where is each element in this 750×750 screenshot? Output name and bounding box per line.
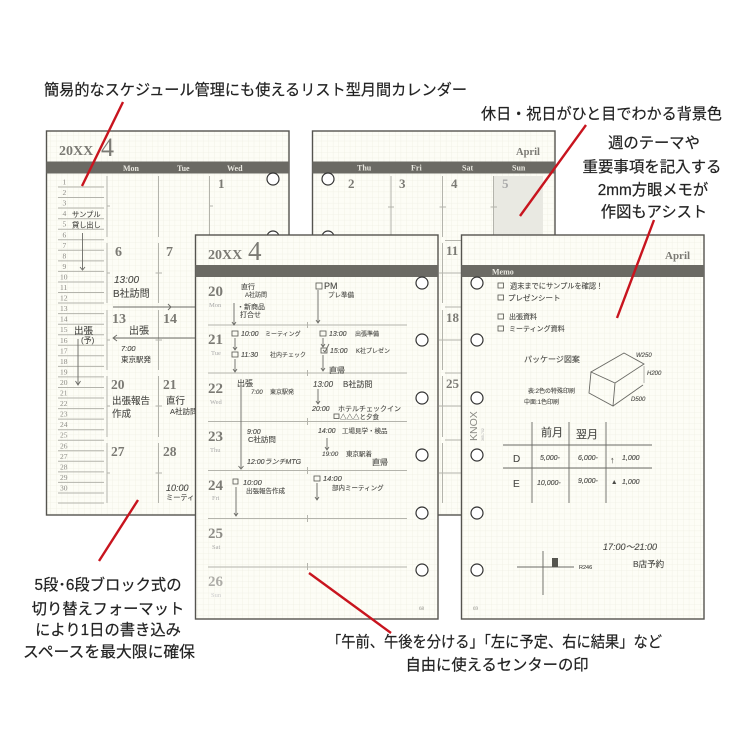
handwritten notes: Tuesday 21: 10:00 [241, 331, 259, 338]
date numbers on left page [111, 176, 224, 459]
handwritten notes: Tuesday 21: 社内チェック [270, 351, 306, 359]
handwritten notes: Monday 20: A社訪問 [245, 291, 267, 299]
dates and weekdays 20 to 26: 25 [208, 526, 223, 542]
handwritten notes in day list: 出張 [74, 325, 94, 337]
list of days 1 to 30: 6 [62, 230, 66, 239]
comparison table sketch: 5,000- [540, 455, 561, 462]
comparison table sketch: 10,000- [537, 480, 561, 487]
memo header bar [462, 265, 704, 277]
dates and weekdays 20 to 26: Sat [212, 544, 220, 551]
heading: left page year and month: 20XX [59, 144, 93, 159]
callout: center marks [309, 573, 662, 674]
checklist: 出張資料 [509, 312, 537, 321]
date numbers on left page: 21 [163, 377, 177, 392]
list of days 1 to 30: 13 [60, 304, 68, 313]
heading: left page year and month: 4 [101, 133, 114, 162]
handwritten notes in day list: サンプル [72, 210, 101, 219]
handwritten notes: Wednesday 22 [237, 378, 401, 469]
package sketch with dimensions: パッケージ図案 [524, 354, 580, 364]
vertical brand label KNOX: KNOX [468, 411, 480, 441]
comparison table sketch: 翌月 [576, 428, 598, 441]
date numbers on left page: 28 [163, 444, 177, 459]
package sketch with dimensions: H200 [647, 371, 662, 377]
handwritten notes: Friday 24: 出張報告作成 [246, 486, 286, 495]
handwritten notes: Friday 24: 10:00 [243, 478, 263, 487]
callout: weekly theme memo grid: 2mm方眼メモが [598, 182, 708, 199]
handwritten notes: Friday 24: 部内ミーティング [332, 483, 384, 492]
weekday bar: Thu Fri Sat Sun [312, 162, 555, 174]
list of days 1 to 30: 24 [60, 420, 68, 429]
handwritten notes: Tuesday 21: 直帰 [329, 365, 345, 375]
comparison table sketch: E [513, 479, 520, 490]
date numbers on right page: 4 [451, 176, 458, 191]
handwritten schedule notes on left page: 作成 [112, 408, 132, 420]
list of days 1 to 30: 14 [60, 315, 68, 324]
weekday bar: Thu Fri Sat Sun: Sun [512, 164, 526, 172]
handwritten notes: Thursday 23: 19:00 [322, 451, 339, 458]
column lines on right page [388, 176, 497, 503]
map sketch with appointment note: 17:00〜21:00 [603, 542, 657, 552]
dates and weekdays 20 to 26: 24 [208, 478, 224, 494]
memo page number: 69 [473, 607, 478, 612]
list of days 1 to 30: 15 [60, 325, 68, 334]
handwritten notes: Monday 20: PM [324, 281, 338, 291]
handwritten notes: Monday 20: プレ準備 [328, 290, 354, 299]
callout: holiday background colour: 休日・祝日がひと目でわかる背景色 [481, 106, 722, 123]
holiday shaded column [494, 176, 543, 236]
dates and weekdays 20 to 26: Mon [209, 302, 222, 309]
binder holes on memo page [471, 277, 483, 576]
date numbers on left page: 13 [112, 312, 126, 327]
handwritten schedule notes on left page [112, 275, 209, 502]
list of days 1 to 30: 4 [62, 209, 66, 218]
callout: switchable block format: スペースを最大限に確保 [23, 644, 195, 661]
day divider lines with center marks [208, 322, 407, 570]
callout: weekly theme memo grid: 週のテーマや [608, 135, 700, 152]
weekday bar: Mon Tue Wed: Wed [227, 164, 243, 173]
dates and weekdays 20 to 26: 23 [208, 429, 223, 445]
memo header bar: Memo [492, 268, 514, 276]
handwritten notes: Tuesday 21: 11:30 [241, 352, 258, 359]
callout: weekly theme memo grid: 重要事項を記入する [582, 159, 722, 176]
list of days 1 to 30: 16 [60, 336, 68, 345]
date numbers on right page: 11 [446, 243, 458, 258]
package sketch with dimensions: 中面:1色印刷 [524, 398, 559, 406]
package sketch with dimensions [524, 353, 662, 406]
weekday bar: Mon Tue Wed: Tue [177, 164, 190, 173]
handwritten notes: Wednesday 22: 東京駅発 [270, 388, 294, 396]
callout: center marks: 自由に使えるセンターの印 [405, 657, 589, 674]
handwritten notes: Thursday 23: C社訪問 [248, 434, 276, 444]
handwritten notes: Thursday 23: 14:00 [318, 428, 336, 435]
handwritten schedule notes on left page: 13:00 [114, 275, 139, 286]
handwritten notes: Wednesday 22: 出張 [237, 378, 253, 388]
list of days 1 to 30: 5 [62, 220, 66, 229]
comparison table sketch: 前月 [541, 425, 563, 439]
comparison table sketch [503, 422, 652, 503]
list of days 1 to 30: 26 [60, 441, 68, 450]
handwritten notes: Friday 24 [233, 474, 384, 516]
list of days 1 to 30: 20 [60, 378, 68, 387]
date numbers on left page: 7 [166, 245, 173, 260]
month label April: April [516, 147, 540, 158]
dates and weekdays 20 to 26: 20 [208, 284, 223, 300]
vertical brand label KNOX: 365-702 [481, 428, 485, 441]
handwritten schedule notes on left page: 出張 [129, 325, 149, 337]
handwritten schedule notes on left page: 10:00 [166, 483, 189, 493]
list of days 1 to 30: 17 [60, 346, 68, 355]
map sketch with appointment note [517, 542, 664, 595]
panel: right monthly calendar page [312, 131, 555, 515]
handwritten notes: Tuesday 21: K社プレゼン [356, 347, 390, 355]
month label April on memo page: April [665, 250, 690, 262]
date numbers on right page: 2 [348, 176, 354, 191]
handwritten notes in day list: 貸し出し [72, 220, 101, 230]
list of days 1 to 30: 28 [60, 462, 68, 471]
handwritten notes: Wednesday 22: B社訪問 [343, 379, 372, 389]
map sketch with appointment note: R246 [579, 565, 592, 571]
list of days 1 to 30: 27 [60, 452, 68, 461]
page number: 68 [419, 607, 424, 612]
comparison table sketch: 1,000 [622, 455, 640, 462]
binder holes on left page [267, 173, 279, 243]
handwritten notes: Monday 20: 直行 [241, 282, 255, 291]
checklist [498, 282, 603, 333]
handwritten notes: Thursday 23: 工場見学・検品 [342, 426, 388, 435]
handwritten notes: Thursday 23 [247, 426, 388, 467]
date numbers on right page: 5 [502, 176, 509, 191]
handwritten notes: Wednesday 22: ホテルチェックイン [338, 405, 401, 413]
heading: left page year and month [59, 133, 114, 162]
comparison table sketch: 9,000- [578, 478, 599, 485]
handwritten notes: Thursday 23: 9:00 [247, 429, 261, 436]
list of days 1 to 30: 23 [60, 410, 68, 419]
list of days 1 to 30: 10 [60, 272, 68, 282]
handwritten schedule notes on left page: 直行 [166, 395, 186, 407]
callout: list-type monthly calendar: 簡易的なスケジュール管理にも使えるリスト型月間カレンダー [44, 81, 467, 99]
comparison table sketch: D [513, 454, 520, 465]
handwritten notes: Friday 24: 14:00 [323, 474, 343, 483]
list of days 1 to 30: 8 [62, 251, 66, 260]
callout: weekly theme memo grid: 作図もアシスト [601, 204, 707, 221]
handwritten notes in day list [72, 210, 101, 385]
binder holes on weekly page [416, 277, 428, 576]
handwritten notes: Wednesday 22: △△△と夕食 [340, 412, 380, 421]
list of days 1 to 30: 19 [60, 367, 68, 376]
list of days 1 to 30: 9 [62, 262, 66, 271]
callout: switchable block format: 切り替えフォーマット [32, 601, 184, 618]
callout: switchable block format: 5段･6段ブロック式の [34, 576, 182, 594]
list of days 1 to 30: 12 [60, 294, 68, 303]
handwritten schedule notes on left page: 東京駅発 [121, 354, 151, 364]
list of days 1 to 30: 1 [62, 178, 66, 186]
heading: weekly page year and month: 20XX [208, 248, 242, 263]
list of days 1 to 30: 3 [62, 199, 66, 208]
dates and weekdays 20 to 26: Thu [210, 447, 221, 454]
callout: holiday background colour [481, 106, 722, 216]
panel: memo page [462, 235, 704, 619]
date numbers on left page: 1 [218, 176, 224, 191]
handwritten schedule notes on left page: B社訪問 [113, 287, 150, 300]
dates and weekdays 20 to 26: Sun [211, 592, 222, 599]
callout: switchable block format [23, 500, 195, 661]
date numbers on right page [348, 176, 509, 391]
checklist: 週末までにサンプルを確認！ [510, 282, 603, 290]
date numbers on left page: 14 [163, 312, 177, 327]
panel: left monthly calendar page [46, 131, 289, 515]
checklist: ミーティング資料 [509, 324, 565, 333]
date numbers on right page: 25 [446, 376, 460, 391]
callout: switchable block format: により1日の書き込み [35, 622, 181, 639]
handwritten notes: Thursday 23: 直帰 [372, 457, 388, 467]
map sketch with appointment note: B店予約 [633, 559, 664, 569]
dates and weekdays 20 to 26: 22 [208, 381, 223, 397]
handwritten notes: Wednesday 22: 13:00 [313, 380, 334, 389]
handwritten notes: Wednesday 22: 7:00 [251, 390, 263, 396]
callout: weekly theme memo grid [582, 135, 722, 318]
comparison table sketch: ▲ [611, 479, 617, 486]
package sketch with dimensions: W250 [636, 353, 652, 359]
date numbers on right page: 3 [399, 176, 406, 191]
dates and weekdays 20 to 26: Tue [211, 350, 221, 357]
calendar grid column lines [107, 176, 213, 503]
list of days 1 to 30: 25 [60, 431, 68, 440]
comparison table sketch: 6,000- [578, 455, 599, 462]
dates and weekdays 20 to 26 [208, 284, 224, 599]
dark header bar [196, 265, 438, 277]
dates and weekdays 20 to 26: Fri [212, 495, 220, 502]
handwritten notes in day list: (予) [81, 336, 95, 345]
list of days 1 to 30: 21 [60, 388, 68, 398]
heading: weekly page year and month [208, 236, 262, 266]
callout: list-type monthly calendar [44, 81, 467, 186]
handwritten schedule notes on left page: ミーティング [166, 493, 209, 502]
handwritten notes: Tuesday 21: ミーティング [265, 330, 301, 338]
list of days 1 to 30 [58, 178, 104, 503]
handwritten notes: Monday 20: 打合せ [240, 310, 261, 319]
package sketch with dimensions: 表:2色の特殊印刷 [528, 387, 575, 395]
date numbers on right page: 18 [446, 310, 460, 325]
list of days 1 to 30: 22 [60, 399, 68, 408]
weekday bar: Thu Fri Sat Sun: Thu [357, 164, 372, 172]
heading: weekly page year and month: 4 [248, 236, 262, 266]
weekday bar: Thu Fri Sat Sun: Sat [462, 164, 473, 172]
checklist: プレゼンシート [508, 292, 560, 302]
list of days 1 to 30: 29 [60, 473, 68, 482]
binder holes on right page [322, 173, 334, 243]
package sketch with dimensions: D500 [631, 397, 646, 403]
handwritten notes: Tuesday 21: 15:00 [330, 348, 348, 355]
list of days 1 to 30: 18 [60, 357, 68, 366]
comparison table sketch: ↑ [610, 455, 614, 465]
date numbers on left page: 20 [111, 377, 125, 392]
dates and weekdays 20 to 26: 26 [208, 574, 224, 590]
handwritten notes: Thursday 23: 12:00ランチMTG [247, 458, 302, 466]
handwritten schedule notes on left page: 7:00 [121, 344, 136, 353]
handwritten notes: Tuesday 21: 出張準備 [355, 330, 379, 338]
callout: center marks: 「午前、午後を分ける」「左に予定、右に結果」など [327, 634, 662, 651]
list of days 1 to 30: 7 [62, 241, 66, 250]
handwritten notes: Monday 20 [232, 281, 354, 325]
panel: weekly list page [196, 235, 438, 619]
handwritten notes: Tuesday 21 [232, 330, 390, 375]
dates and weekdays 20 to 26: Wed [210, 399, 222, 406]
dates and weekdays 20 to 26: 21 [208, 332, 223, 348]
comparison table sketch: 1,000 [622, 479, 640, 486]
handwritten schedule notes on left page: A社訪問 [170, 406, 198, 416]
weekday bar: Mon Tue Wed [46, 162, 289, 174]
weekday bar: Mon Tue Wed: Mon [123, 164, 140, 173]
handwritten notes: Monday 20: ・新商品 [237, 302, 265, 311]
handwritten notes: Tuesday 21: 13:00 [329, 331, 347, 338]
list of days 1 to 30: 11 [60, 283, 67, 292]
handwritten notes: Thursday 23: 東京駅着 [346, 449, 372, 458]
date numbers on left page: 27 [111, 444, 125, 459]
list of days 1 to 30: 2 [62, 188, 66, 197]
date numbers on left page: 6 [115, 245, 122, 260]
handwritten notes: Wednesday 22: 20:00 [311, 406, 330, 413]
weekday bar: Thu Fri Sat Sun: Fri [411, 164, 422, 172]
list of days 1 to 30: 30 [60, 484, 68, 492]
handwritten schedule notes on left page: 出張報告 [112, 395, 150, 407]
